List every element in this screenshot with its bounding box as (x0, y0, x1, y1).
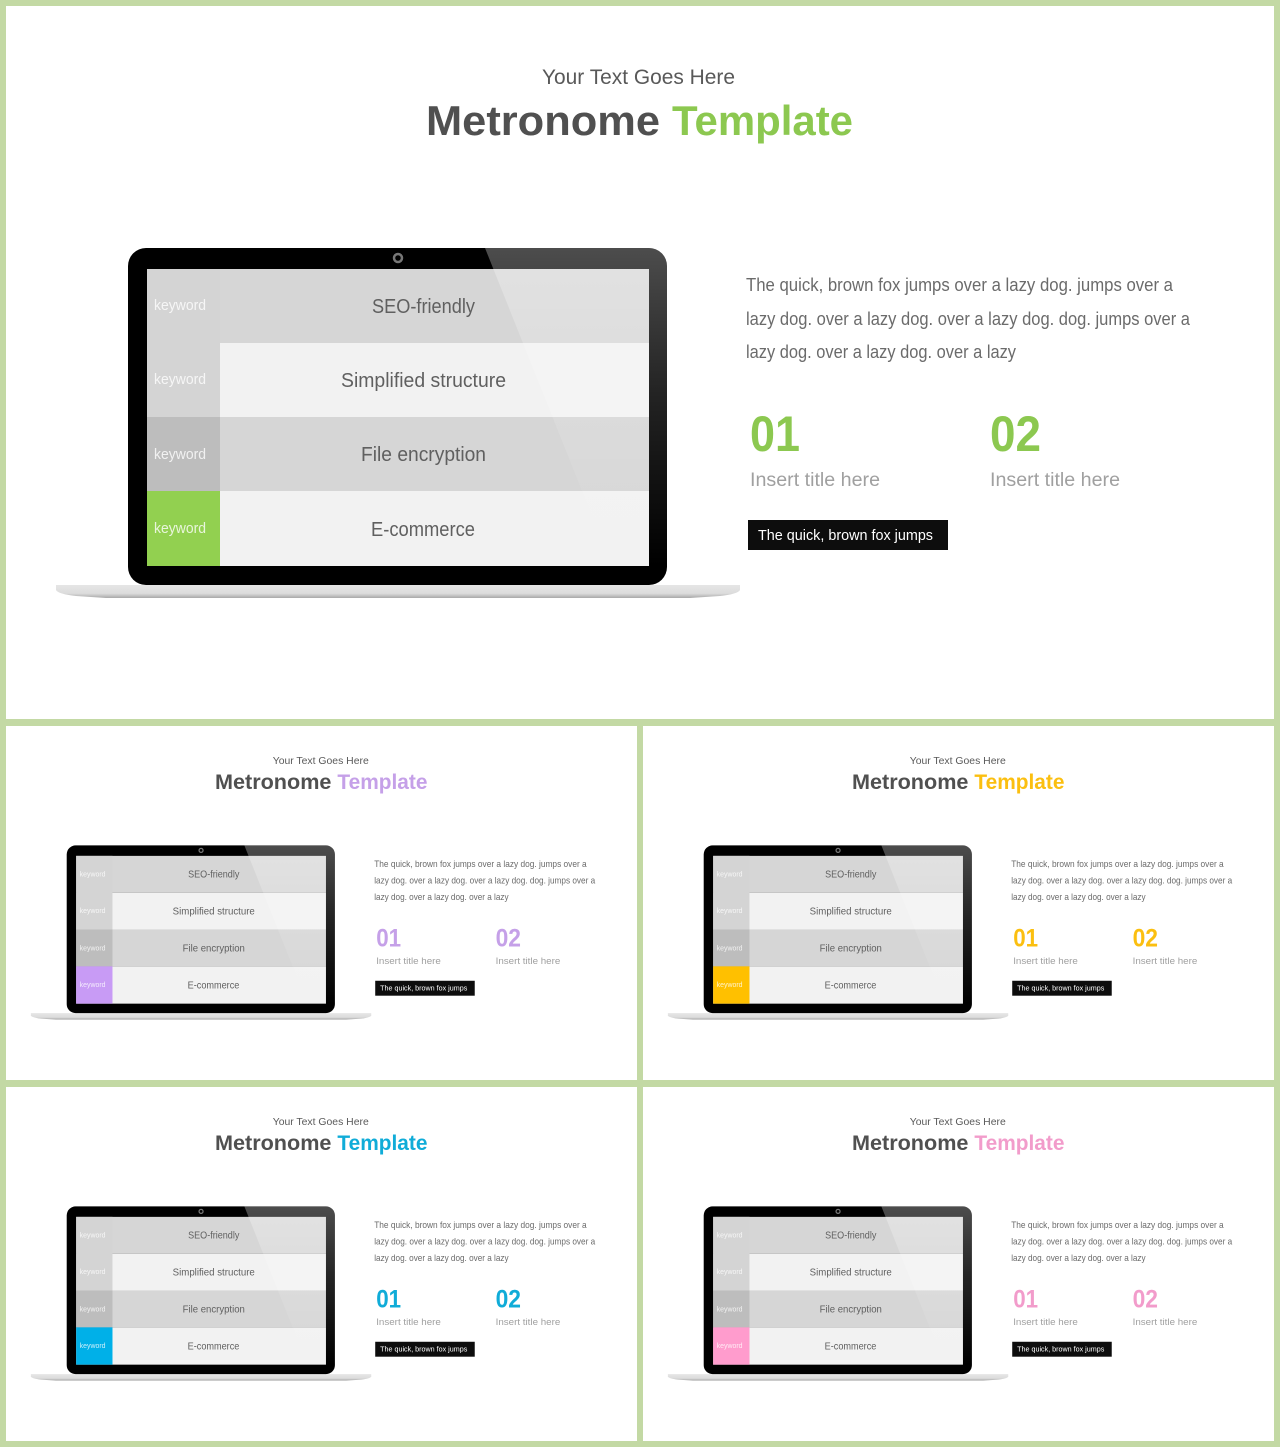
item 01: Insert title here (750, 470, 880, 491)
laptop: File encryption (183, 943, 245, 954)
item 01: Insert title here (1013, 1317, 1078, 1328)
subtitle: Your Text Goes Here (273, 756, 369, 767)
laptop: keyword (80, 906, 106, 915)
black caption: The quick, brown fox jumps (1017, 984, 1105, 993)
paragraph: The quick, brown fox jumps over a lazy dog. jumps over a (374, 1220, 587, 1230)
laptop: File encryption (361, 444, 486, 466)
laptop: keyword (717, 980, 743, 989)
title (215, 1132, 427, 1155)
slide: blue (6, 1087, 637, 1441)
item 02: 02 (990, 406, 1041, 462)
laptop: keyword (717, 1267, 743, 1276)
black caption: The quick, brown fox jumps (380, 1345, 468, 1354)
subtitle: Your Text Goes Here (910, 1117, 1006, 1128)
item 01: Insert title here (1013, 956, 1078, 967)
black caption: The quick, brown fox jumps (380, 984, 468, 993)
item 02: Insert title here (1133, 1317, 1197, 1328)
paragraph (374, 859, 595, 902)
paragraph (374, 1220, 595, 1263)
item 02: 02 (1133, 924, 1158, 952)
paragraph: The quick, brown fox jumps over a lazy dog. jumps over a (1011, 1220, 1224, 1230)
item 01: Insert title here (376, 956, 441, 967)
laptop: File encryption (820, 943, 882, 954)
subtitle: Your Text Goes Here (542, 66, 735, 89)
laptop: keyword (717, 1230, 743, 1239)
laptop (31, 845, 371, 1020)
item 02 (990, 406, 1120, 491)
item 02: 02 (496, 924, 521, 952)
laptop: keyword (80, 943, 106, 952)
paragraph (1011, 859, 1232, 902)
item 01: 01 (750, 406, 800, 462)
laptop: Simplified structure (173, 1268, 255, 1279)
item 02: Insert title here (496, 956, 560, 967)
title: Metronome (852, 771, 968, 794)
slide: main green (6, 6, 1274, 719)
paragraph: lazy dog. over a lazy dog. over a lazy dog. dog. jumps over a (374, 1237, 595, 1247)
item 02: Insert title here (496, 1317, 560, 1328)
laptop: File encryption (820, 1304, 882, 1315)
laptop: keyword (717, 1341, 743, 1350)
black caption: The quick, brown fox jumps (758, 527, 933, 544)
laptop: keyword (80, 869, 106, 878)
paragraph: lazy dog. over a lazy dog. over a lazy dog. dog. jumps over a (374, 876, 595, 886)
laptop: SEO-friendly (188, 870, 239, 881)
title: Template (672, 97, 853, 144)
laptop: keyword (80, 980, 106, 989)
black caption (748, 520, 948, 550)
slide: purple (6, 726, 637, 1080)
item 01 (1013, 924, 1078, 967)
laptop: E-commerce (188, 981, 240, 992)
paragraph: lazy dog. over a lazy dog. over a lazy (1011, 892, 1146, 902)
paragraph: lazy dog. over a lazy dog. over a lazy dog. dog. jumps over a (1011, 876, 1232, 886)
laptop: E-commerce (188, 1342, 240, 1353)
black caption (1012, 1342, 1112, 1357)
item 01: 01 (1013, 1285, 1038, 1313)
laptop: Simplified structure (810, 1268, 892, 1279)
title: Template (974, 771, 1064, 794)
laptop: E-commerce (825, 981, 877, 992)
item 01 (376, 924, 441, 967)
laptop: SEO-friendly (825, 870, 876, 881)
paragraph: The quick, brown fox jumps over a lazy dog. jumps over a (746, 275, 1174, 295)
laptop: keyword (80, 1341, 106, 1350)
laptop: E-commerce (371, 519, 475, 541)
laptop: keyword (80, 1304, 106, 1313)
item 02 (1133, 924, 1197, 967)
title: Metronome (215, 1132, 331, 1155)
paragraph: The quick, brown fox jumps over a lazy dog. jumps over a (374, 859, 587, 869)
title: Template (974, 1132, 1064, 1155)
slide: pink (643, 1087, 1274, 1441)
laptop: keyword (717, 943, 743, 952)
item 02 (1133, 1285, 1197, 1328)
laptop: keyword (717, 906, 743, 915)
laptop (668, 1206, 1008, 1381)
paragraph: lazy dog. over a lazy dog. over a lazy (1011, 1253, 1146, 1263)
laptop: keyword (154, 446, 206, 463)
item 01: 01 (376, 924, 401, 952)
item 02: 02 (1133, 1285, 1158, 1313)
laptop: File encryption (183, 1304, 245, 1315)
item 01: Insert title here (376, 1317, 441, 1328)
laptop: Simplified structure (810, 907, 892, 918)
item 02: Insert title here (1133, 956, 1197, 967)
laptop: SEO-friendly (188, 1231, 239, 1242)
laptop: keyword (717, 1304, 743, 1313)
subtitle: Your Text Goes Here (273, 1117, 369, 1128)
laptop (31, 1206, 371, 1381)
laptop: keyword (717, 869, 743, 878)
title: Metronome (852, 1132, 968, 1155)
title (852, 1132, 1064, 1155)
laptop: SEO-friendly (372, 296, 475, 318)
paragraph: lazy dog. over a lazy dog. over a lazy (374, 1253, 509, 1263)
item 01: 01 (1013, 924, 1038, 952)
item 01 (1013, 1285, 1078, 1328)
paragraph (1011, 1220, 1232, 1263)
title (426, 97, 853, 144)
subtitle: Your Text Goes Here (910, 756, 1006, 767)
black caption (375, 981, 475, 996)
item 02 (496, 1285, 560, 1328)
laptop: keyword (154, 371, 206, 388)
item 01 (750, 406, 880, 491)
slide: yellow (643, 726, 1274, 1080)
laptop: E-commerce (825, 1342, 877, 1353)
laptop: Simplified structure (173, 907, 255, 918)
title: Metronome (426, 97, 660, 144)
title: Metronome (215, 771, 331, 794)
laptop: keyword (154, 520, 206, 537)
paragraph: lazy dog. over a lazy dog. over a lazy dog. dog. jumps over a (746, 309, 1191, 329)
paragraph: lazy dog. over a lazy dog. over a lazy dog. dog. jumps over a (1011, 1237, 1232, 1247)
item 02: Insert title here (990, 470, 1120, 491)
title: Template (337, 771, 427, 794)
paragraph: lazy dog. over a lazy dog. over a lazy (746, 342, 1016, 362)
item 01 (376, 1285, 441, 1328)
laptop: keyword (80, 1267, 106, 1276)
title (215, 771, 427, 794)
paragraph: The quick, brown fox jumps over a lazy dog. jumps over a (1011, 859, 1224, 869)
paragraph: lazy dog. over a lazy dog. over a lazy (374, 892, 509, 902)
title (852, 771, 1064, 794)
item 02: 02 (496, 1285, 521, 1313)
title: Template (337, 1132, 427, 1155)
paragraph (746, 275, 1191, 362)
black caption: The quick, brown fox jumps (1017, 1345, 1105, 1354)
laptop: keyword (154, 297, 206, 314)
item 01: 01 (376, 1285, 401, 1313)
laptop: SEO-friendly (825, 1231, 876, 1242)
black caption (1012, 981, 1112, 996)
black caption (375, 1342, 475, 1357)
laptop (668, 845, 1008, 1020)
laptop (56, 248, 740, 598)
laptop: Simplified structure (341, 370, 506, 392)
item 02 (496, 924, 560, 967)
laptop: keyword (80, 1230, 106, 1239)
